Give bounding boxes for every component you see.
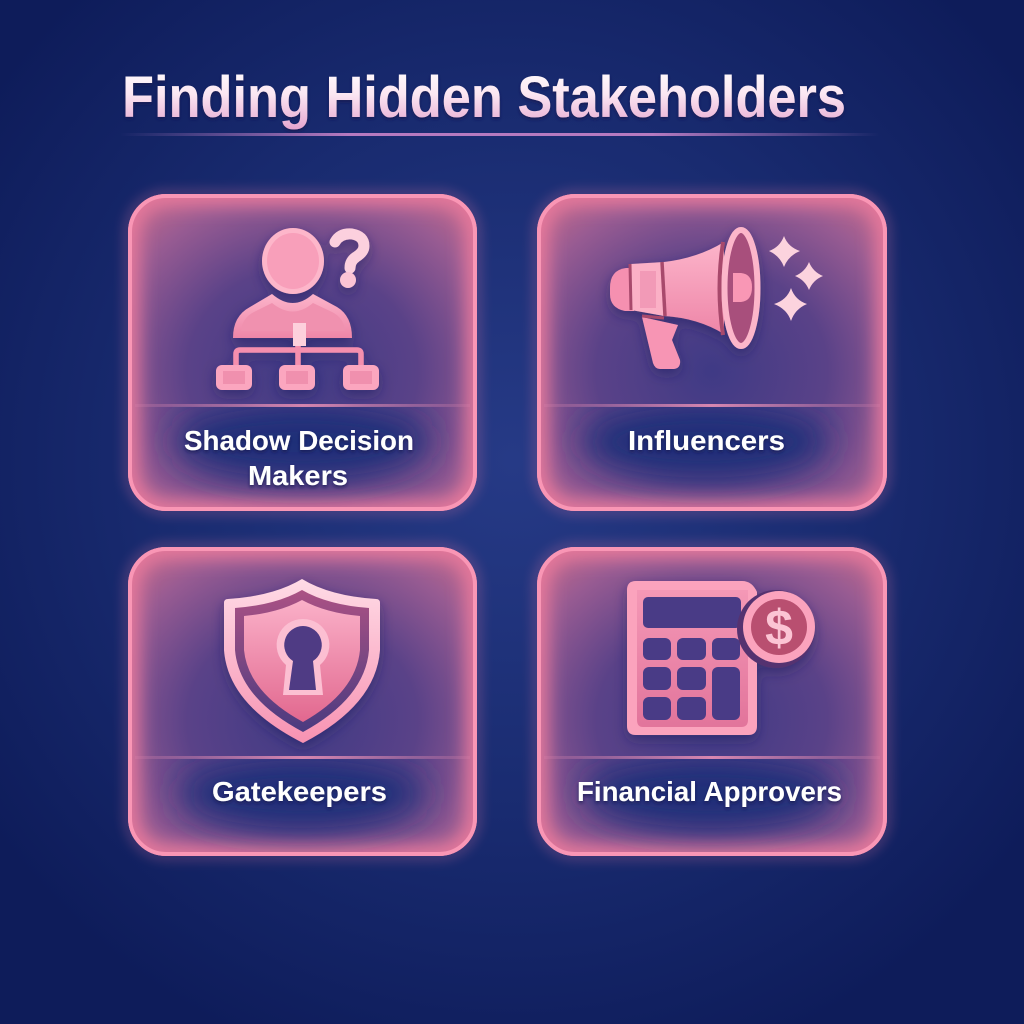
label: Influencers (628, 425, 785, 456)
title: Finding Hidden Stakeholders (122, 65, 846, 130)
icon: megaphone (610, 230, 758, 369)
panel: influencers (537, 194, 887, 511)
panel: gatekeepers (128, 547, 477, 856)
panel: shadow decision makers (128, 194, 477, 511)
label (184, 425, 414, 491)
icon: calculator with dollar coin (627, 581, 815, 735)
icon: sparkles (769, 236, 823, 321)
panel: financial approvers (537, 547, 887, 856)
label: Makers (248, 460, 348, 491)
label: Financial Approvers (577, 776, 842, 807)
label: Shadow Decision (184, 425, 414, 456)
label: Gatekeepers (212, 776, 387, 807)
icon: calculator with dollar coin: $ (765, 600, 793, 656)
icon: person with org chart (216, 228, 379, 390)
icon: shield with keyhole (224, 579, 380, 743)
